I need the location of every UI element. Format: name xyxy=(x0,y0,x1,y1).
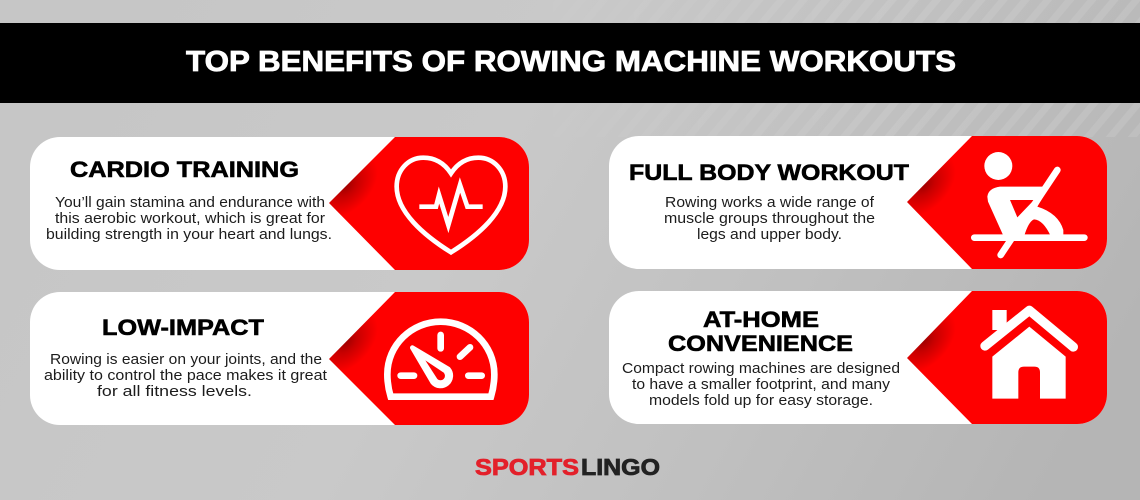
text: at-home description: Compact rowing machines are designed xyxy=(622,361,900,377)
panel: cardio training xyxy=(30,137,529,270)
text: cardio description xyxy=(46,195,332,243)
text: at-home description: to have a smaller footprint, and many xyxy=(632,377,891,393)
text: low-impact description: Rowing is easier on your joints, and the xyxy=(50,352,322,368)
heading: full body workout: FULL BODY WORKOUT xyxy=(629,160,909,185)
text: full body description: muscle groups throughout the xyxy=(664,211,875,227)
text: cardio description: building strength in your heart and lungs. xyxy=(46,227,332,243)
icon: heart with pulse xyxy=(397,158,505,252)
heading: cardio training: CARDIO TRAINING xyxy=(70,157,299,182)
text: full body description: Rowing works a wide range of xyxy=(665,195,875,211)
text: at-home description: models fold up for easy storage. xyxy=(649,393,873,409)
title: TOP BENEFITS OF ROWING MACHINE WORKOUTS xyxy=(186,46,956,78)
text: full body description xyxy=(664,195,875,243)
text: low-impact description: for all fitness levels. xyxy=(97,384,252,400)
text: cardio description: this aerobic workout, which is great for xyxy=(55,211,325,227)
heading: at-home convenience: CONVENIENCE xyxy=(668,331,853,356)
text: low-impact description: ability to control the pace makes it great xyxy=(44,368,327,384)
heading: at-home convenience: AT-HOME xyxy=(703,307,819,332)
text: cardio description: You’ll gain stamina and endurance with xyxy=(55,195,325,211)
icon: speedometer xyxy=(387,322,494,397)
panel: at-home convenience xyxy=(609,291,1107,424)
panel: low-impact xyxy=(30,292,529,425)
text: at-home description xyxy=(622,361,900,409)
logo: sportslingo: SPORTS xyxy=(475,454,579,480)
text: low-impact description xyxy=(44,352,327,400)
panel: full body workout xyxy=(609,136,1107,269)
heading: at-home convenience xyxy=(668,307,853,356)
heading: low-impact: LOW-IMPACT xyxy=(102,315,264,340)
title banner xyxy=(0,23,1140,103)
text: full body description: legs and upper body. xyxy=(697,227,842,243)
logo: sportslingo xyxy=(475,454,660,480)
icon: house xyxy=(985,310,1073,399)
icon: rower xyxy=(974,152,1084,255)
logo: sportslingo: LINGO xyxy=(581,454,660,480)
